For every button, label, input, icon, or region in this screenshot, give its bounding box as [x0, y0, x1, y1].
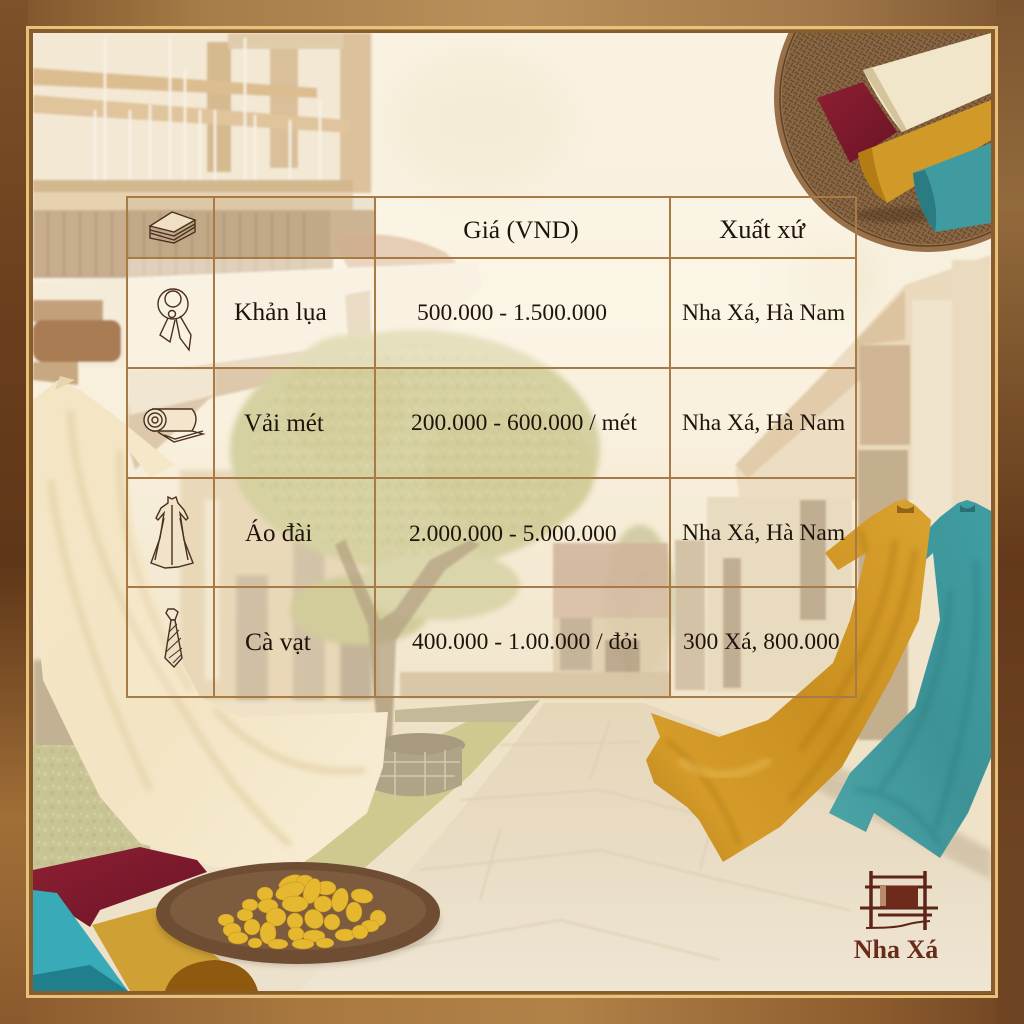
- Cà vạt row: [245, 627, 840, 656]
- icon: folded fabric: [150, 212, 195, 243]
- Cà vạt row: Cà vạt: [245, 627, 311, 656]
- icon: ao dai: [151, 497, 193, 568]
- Nha Xá loom logo: [854, 871, 938, 964]
- Áo dài row: 2.000.000 - 5.000.000: [409, 521, 617, 547]
- basket of golden cocoons: [156, 862, 440, 966]
- Áo dài row: Áo đài: [245, 519, 312, 547]
- soft foliage haze: [402, 60, 869, 306]
- Nha Xá loom logo: Nha Xá: [854, 935, 938, 964]
- Vải mét row: Nha Xá, Hà Nam: [682, 410, 845, 436]
- icon: necktie: [165, 609, 182, 667]
- crimson silk fold: [817, 82, 897, 163]
- loom structure, upper left: [33, 33, 482, 470]
- gold cloth: [92, 907, 222, 991]
- Khăn lụa row: Nha Xá, Hà Nam: [682, 300, 845, 326]
- Cà vạt row: 400.000 - 1.00.000 / đỏi: [412, 629, 639, 655]
- Khăn lụa row: Khản lụa: [234, 297, 327, 326]
- Cà vạt row: 300 Xá, 800.000: [683, 629, 840, 655]
- right building with colonnade: [675, 255, 991, 740]
- stone paved path: [398, 703, 991, 960]
- teal roll: [33, 890, 128, 991]
- flowing cream silk, left: [33, 376, 388, 867]
- teal silk roll: [913, 143, 991, 232]
- price table: [127, 197, 856, 697]
- courtyard house at end of path: [400, 543, 670, 698]
- Vải mét row: [244, 410, 845, 437]
- header row: Giá (VND): [463, 215, 579, 244]
- gold silk roll: [858, 100, 991, 203]
- Áo dài row: [245, 519, 845, 547]
- cream silk fold: [863, 33, 991, 132]
- grass and hedge: [33, 700, 540, 880]
- Khăn lụa row: 500.000 - 1.500.000: [417, 300, 607, 326]
- stone tree well: [375, 733, 465, 800]
- distant building and columns, left: [33, 470, 380, 750]
- table grid: [127, 197, 856, 697]
- header row: [463, 214, 807, 244]
- icon: silk scarf: [158, 289, 191, 350]
- icon: fabric roll: [144, 409, 203, 442]
- crimson cloth: [33, 847, 207, 927]
- tree with canopy: [230, 330, 675, 740]
- teal ao dai, right: [829, 500, 993, 858]
- golden ao dai, right: [646, 499, 931, 862]
- table translucent panel: [127, 197, 856, 697]
- Vải mét row: 200.000 - 600.000 / mét: [411, 410, 637, 436]
- Khăn lụa row: [234, 297, 845, 326]
- Áo dài row: Nha Xá, Hà Nam: [682, 520, 845, 546]
- stacked silk, bottom left: [33, 847, 258, 991]
- woven basket with silk rolls, top right: [774, 33, 991, 252]
- header row: Xuất xứ: [719, 214, 807, 244]
- Vải mét row: Vải mét: [244, 410, 324, 437]
